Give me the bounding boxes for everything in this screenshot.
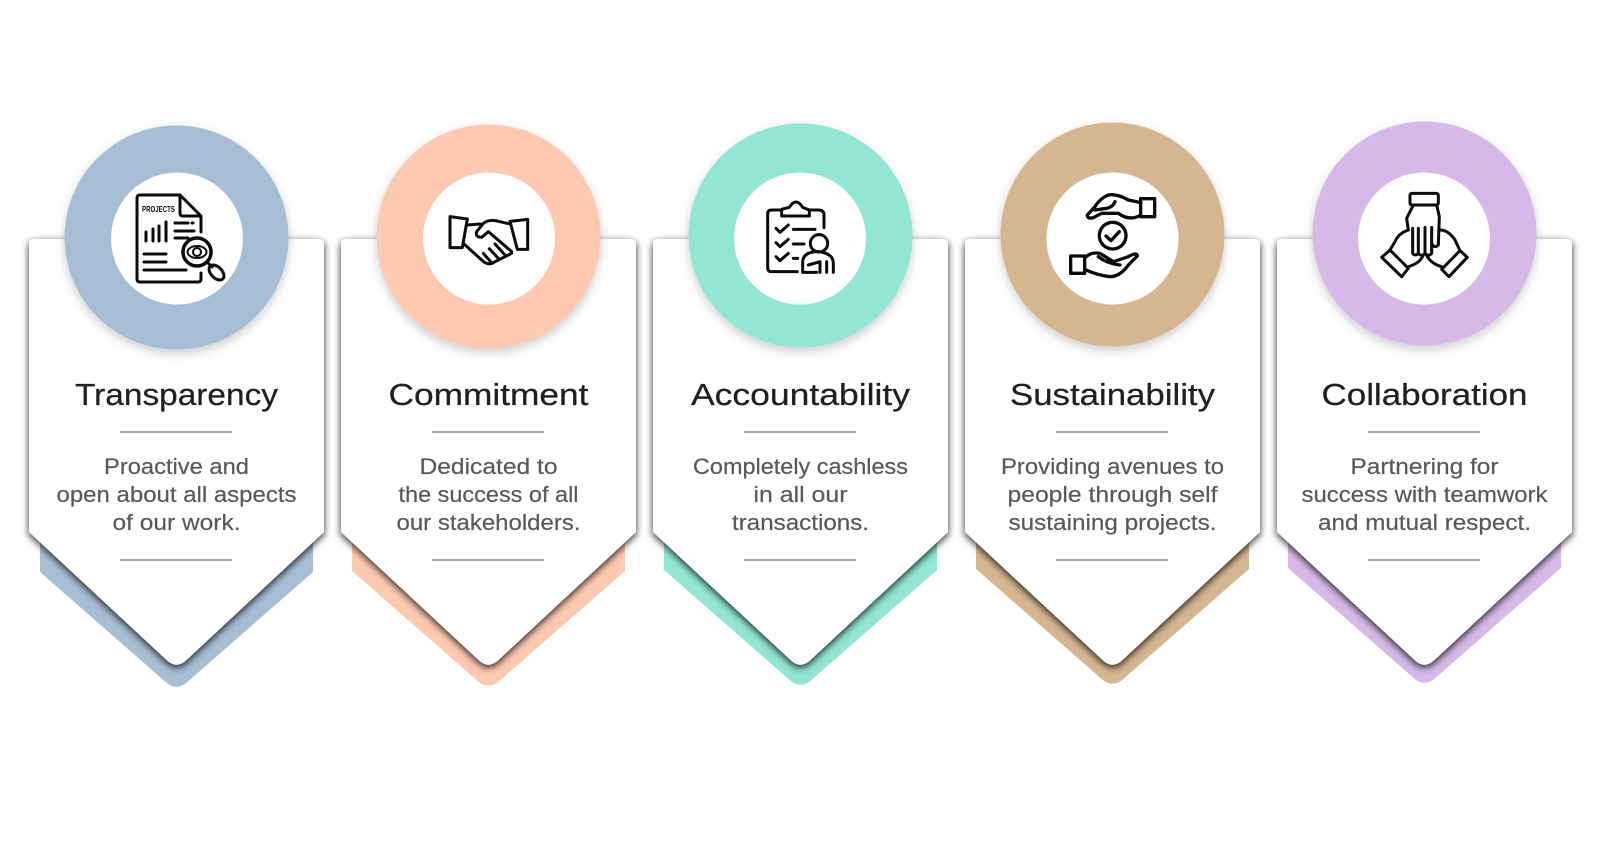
ring bbox=[376, 124, 600, 348]
ring bbox=[1312, 122, 1536, 346]
rule bbox=[120, 431, 232, 433]
card bbox=[965, 239, 1260, 665]
chevron backing bbox=[664, 478, 937, 685]
icon: handshake bbox=[450, 217, 528, 264]
rule bbox=[744, 559, 856, 561]
description: people through self bbox=[1008, 482, 1218, 507]
card bbox=[29, 239, 324, 665]
panel: Accountability bbox=[653, 124, 948, 685]
description: in all our bbox=[754, 482, 848, 507]
rule bbox=[1368, 431, 1480, 433]
description: the success of all bbox=[398, 482, 578, 507]
inner circle bbox=[1046, 172, 1178, 304]
description: Proactive and bbox=[104, 454, 249, 479]
description: Completely cashless bbox=[693, 454, 908, 479]
rule bbox=[744, 431, 856, 433]
rule bbox=[432, 431, 544, 433]
card bbox=[653, 239, 948, 665]
rule bbox=[1056, 431, 1168, 433]
description: Dedicated to bbox=[420, 454, 558, 479]
icon: project report with magnifier: PROJECTS bbox=[142, 204, 175, 214]
description: and mutual respect. bbox=[1318, 510, 1531, 535]
description bbox=[56, 454, 296, 535]
chevron backing bbox=[352, 479, 625, 686]
icon: project report with magnifier bbox=[137, 195, 227, 283]
description: Partnering for bbox=[1350, 454, 1499, 479]
icon: hands protecting a check mark bbox=[1071, 195, 1155, 277]
chevron backing bbox=[976, 477, 1249, 684]
icon: three hands stacked bbox=[1382, 193, 1467, 277]
heading: Collaboration bbox=[1322, 377, 1528, 412]
chevron backing bbox=[1288, 476, 1561, 683]
heading: Sustainability bbox=[1010, 377, 1216, 412]
description bbox=[1302, 454, 1548, 535]
icon: clipboard checklist with person bbox=[768, 202, 833, 272]
rule bbox=[432, 559, 544, 561]
inner circle bbox=[423, 172, 555, 304]
heading: Transparency bbox=[75, 377, 279, 412]
description bbox=[1001, 454, 1224, 535]
rule bbox=[1056, 559, 1168, 561]
inner circle bbox=[1358, 172, 1490, 304]
panel: Commitment bbox=[341, 124, 636, 686]
ring bbox=[688, 124, 912, 348]
panel: Sustainability bbox=[965, 122, 1260, 684]
inner circle bbox=[111, 172, 243, 304]
description: our stakeholders. bbox=[396, 510, 580, 535]
description bbox=[396, 454, 580, 535]
description bbox=[693, 454, 908, 535]
description: sustaining projects. bbox=[1008, 510, 1216, 535]
description: of our work. bbox=[112, 510, 240, 535]
description: Providing avenues to bbox=[1001, 454, 1224, 479]
description: success with teamwork bbox=[1302, 482, 1548, 507]
description: open about all aspects bbox=[56, 482, 296, 507]
heading: Accountability bbox=[691, 377, 911, 412]
rule bbox=[1368, 559, 1480, 561]
inner circle bbox=[734, 172, 866, 304]
heading: Commitment bbox=[388, 377, 589, 412]
description: transactions. bbox=[732, 510, 869, 535]
card bbox=[341, 239, 636, 665]
ring bbox=[64, 126, 288, 350]
rule bbox=[120, 559, 232, 561]
panel: Collaboration bbox=[1277, 122, 1572, 683]
chevron backing bbox=[40, 480, 313, 687]
ring bbox=[1000, 122, 1224, 346]
card bbox=[1277, 239, 1572, 665]
panel: Transparency bbox=[29, 126, 324, 687]
